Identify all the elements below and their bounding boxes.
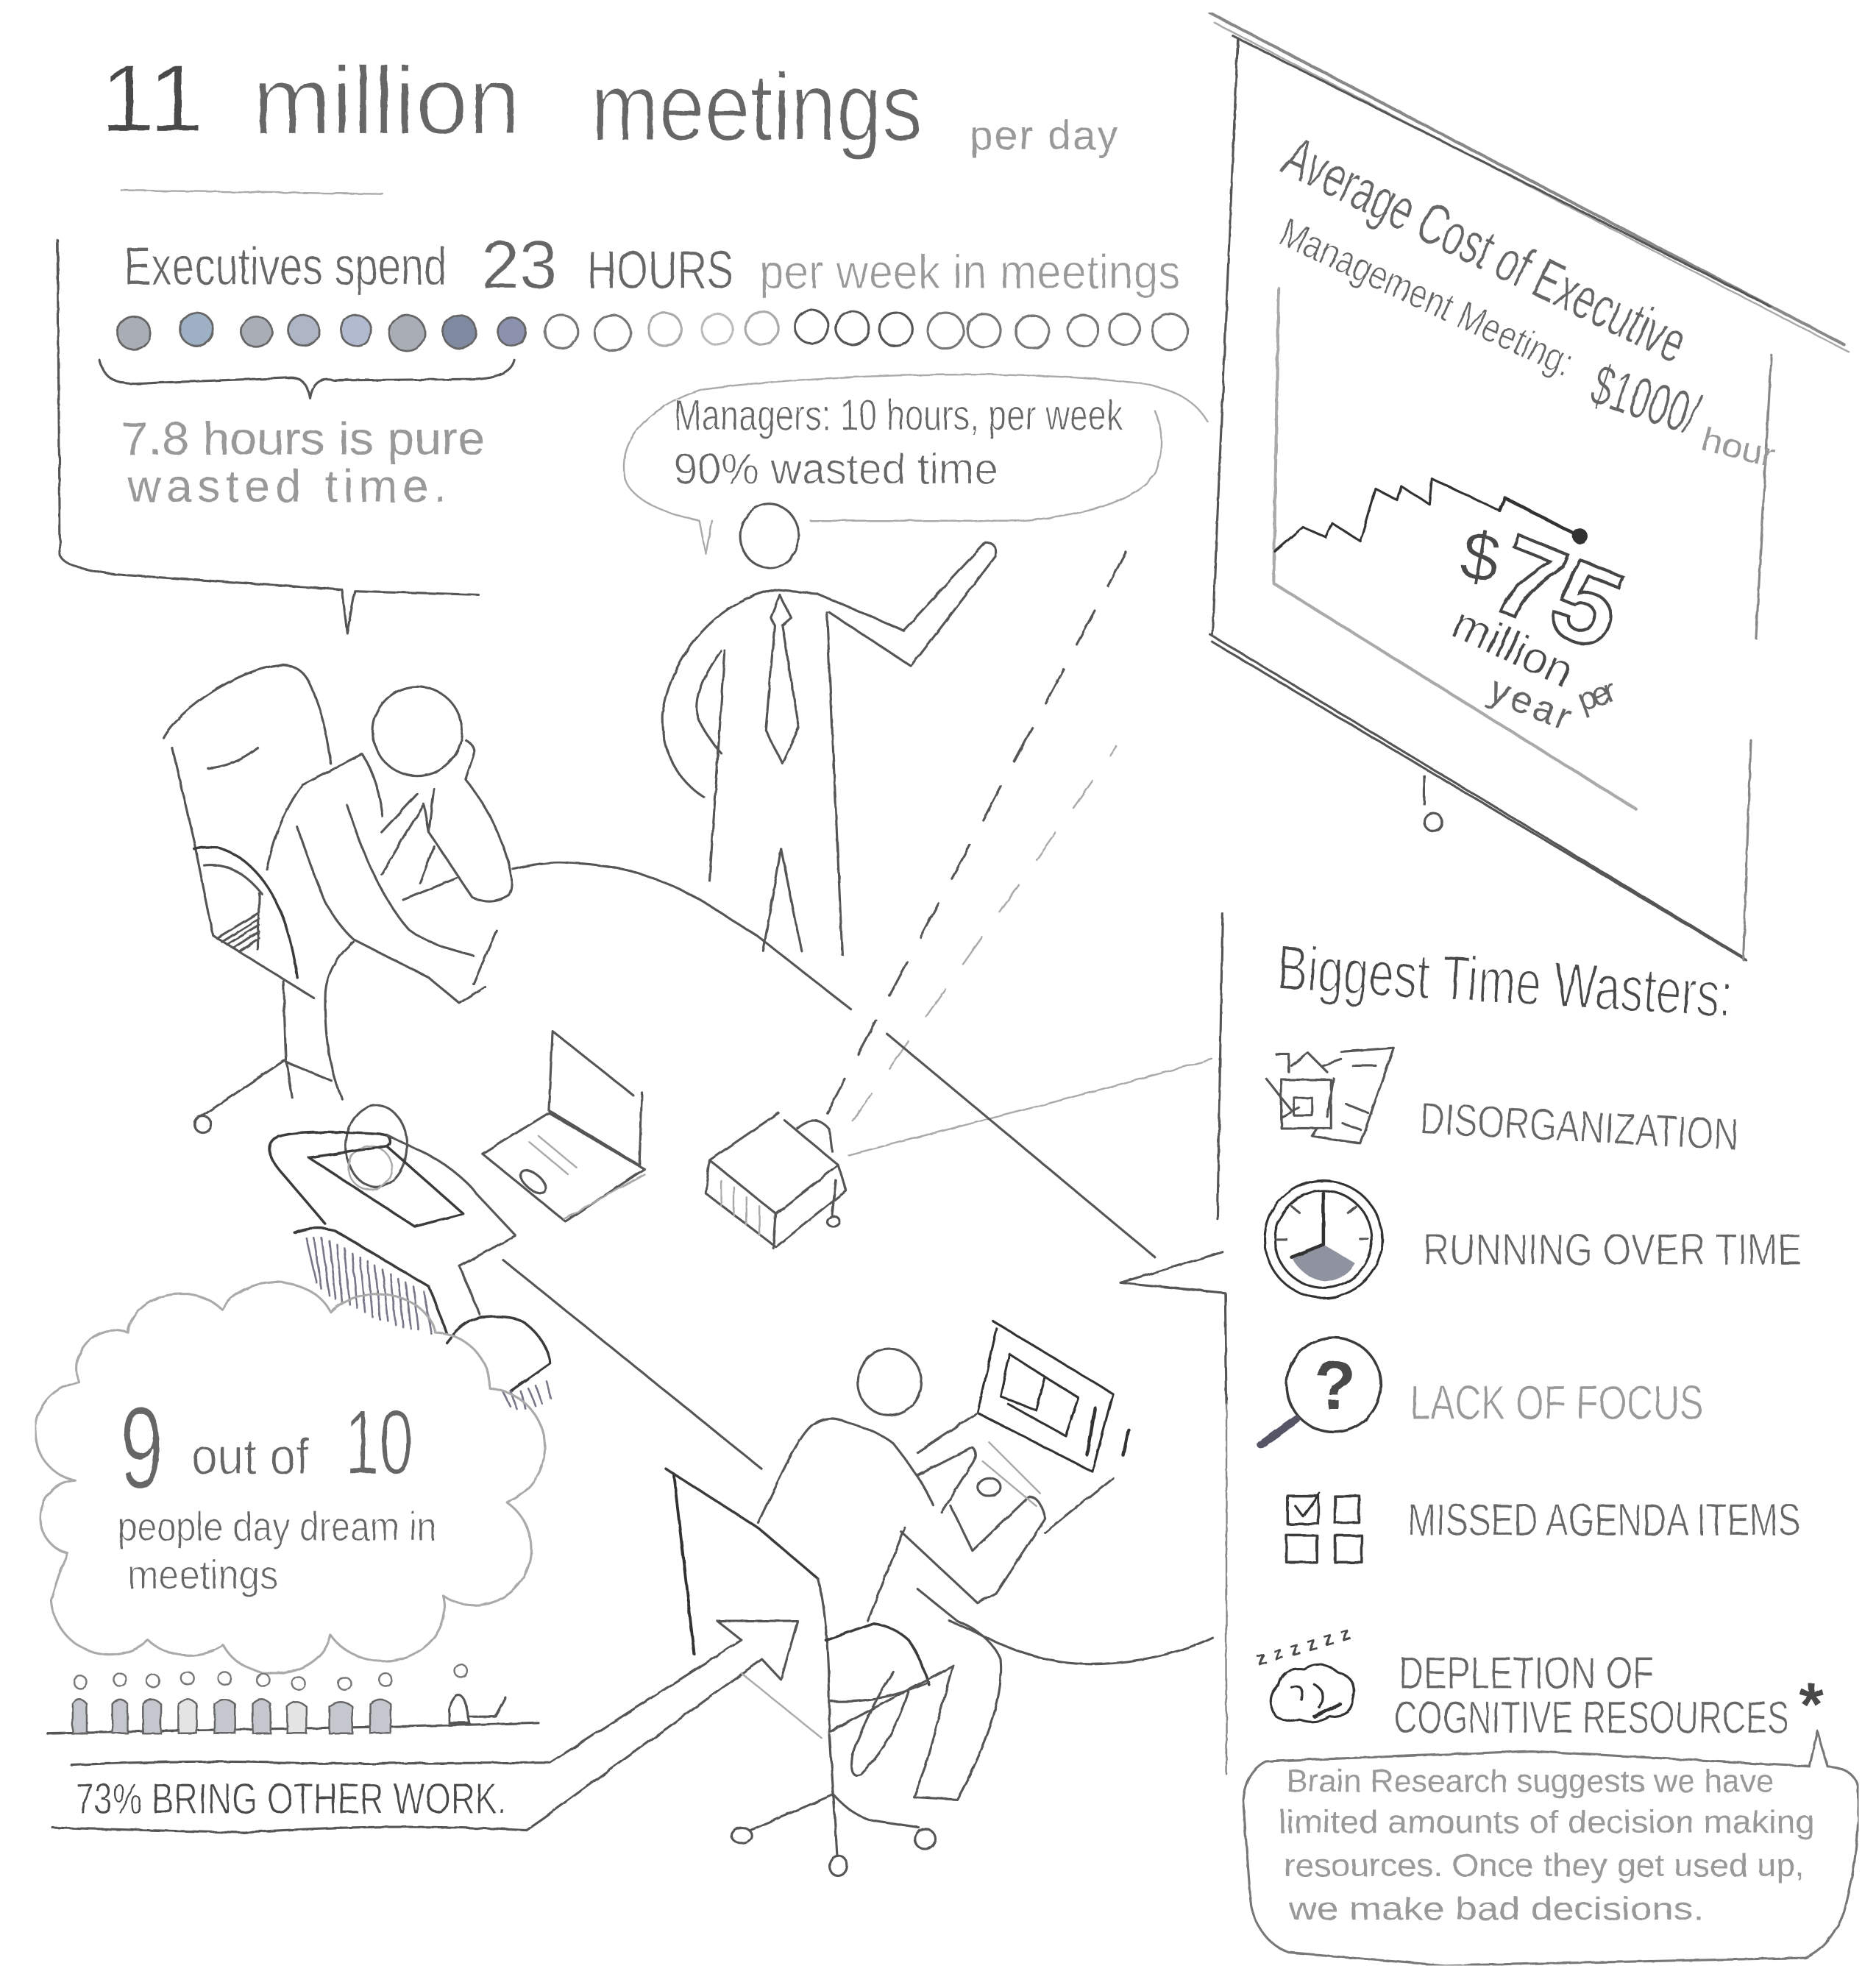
heading: executives spend 23 hours [124,226,1181,303]
tie [766,594,799,763]
projector screen frame [1209,13,1850,960]
thought cloud: 9 out of 10 daydream: 10 [344,1392,413,1494]
figure: 75 million per year [1444,511,1639,739]
screen heading: hour [1698,420,1779,475]
figure: presenter [662,504,996,955]
footnote bubble [1243,1730,1858,1965]
heading: executives spend 23 hours: Executives spend [124,237,447,297]
screen: average cost of meetings [1209,13,1850,960]
chair seen from above [295,1228,551,1409]
wasted time note: 7.8 hours is pure [121,413,485,465]
footnote bubble: Brain Research suggests we have [1287,1764,1774,1800]
speech frame [57,240,479,633]
figure: executive seen from above [269,1105,551,1409]
item: running over time: RUNNING OVER TIME [1423,1224,1802,1274]
arrow: 73% bring other work: 73% BRING OTHER WORK. [75,1775,507,1823]
hour dots: 8 shaded of 22 [118,310,1188,351]
laptop on table [483,1032,644,1221]
title: million [252,46,521,155]
title: 11 [99,44,205,152]
item: disorganization [1266,1048,1740,1160]
title [99,44,1118,194]
thought cloud: 9 out of 10 daydream: out of [191,1428,309,1485]
item: depletion of cognitive resources: DEPLETION OF [1399,1647,1654,1699]
meeting table [325,862,1212,1664]
chair [163,665,332,1133]
arrow: 73% bring other work [52,1621,797,1833]
wasted time note [121,413,485,512]
item: missed agenda items [1287,1494,1801,1562]
dashed projector beams [827,533,1212,1155]
item: depletion of cognitive resources [1254,1622,1824,1744]
title: meetings [591,53,923,161]
projector on table [706,1113,846,1249]
executive tie [382,794,457,900]
figure: 75 million per year: $ [1455,515,1506,598]
figure: 75 million per year: 75 [1477,511,1639,674]
footnote bubble: we make bad decisions. [1288,1892,1704,1927]
figure: 75 million per year: year [1483,668,1577,739]
laptop [917,1321,1128,1533]
heading: executives spend 23 hours: 23 [481,226,558,303]
figure: executive working on laptop [667,1321,1128,1876]
figure: 75 million per year: per [1572,671,1621,719]
thought cloud: 9 out of 10 daydream: 9 [120,1382,163,1513]
panel: biggest time wasters [1120,914,1858,1965]
speech bubble: managers: Managers: 10 hours, per week [674,392,1123,440]
item: depletion of cognitive resources: zzzzzz [1254,1622,1353,1670]
chair base and casters [731,1734,936,1876]
people row: 9 of 10 shaded [47,1664,539,1733]
screen heading: Management Meeting: [1273,209,1581,386]
figure: executive at left with head on hand [163,665,512,1133]
speech bubble: managers [624,374,1207,554]
footnote bubble: resources. Once they get used up, [1284,1848,1805,1884]
item: lack of focus: ? [1314,1346,1356,1424]
item: disorganization: DISORGANIZATION [1418,1093,1740,1160]
speech bubble: managers: 90% wasted time [674,445,998,493]
footnote bubble: limited amounts of decision making [1279,1805,1815,1840]
item: depletion of cognitive resources: * [1799,1670,1824,1739]
brace [99,360,514,398]
screen heading: $1000/ [1584,352,1708,447]
panel: executives hours in meetings [57,226,1188,633]
heading: executives spend 23 hours: HOURS [587,241,733,300]
item: running over time [1265,1181,1802,1298]
line chart [1275,479,1588,551]
title: per day [970,113,1118,158]
thought cloud: 9 out of 10 daydream [35,1282,545,1673]
figure: 75 million per year: million [1444,597,1582,697]
thought cloud: 9 out of 10 daydream: people day dream in [118,1504,436,1549]
thought cloud: 9 out of 10 daydream: meetings [127,1552,278,1598]
item: lack of focus: LACK OF FOCUS [1410,1375,1704,1430]
wasted time note: wasted time. [127,461,447,512]
armrest and leg [825,1589,1001,1800]
person working [450,1695,505,1723]
item: lack of focus [1261,1338,1704,1445]
heading: executives spend 23 hours: per week in meetings [759,244,1181,299]
chair back [667,1469,830,1739]
